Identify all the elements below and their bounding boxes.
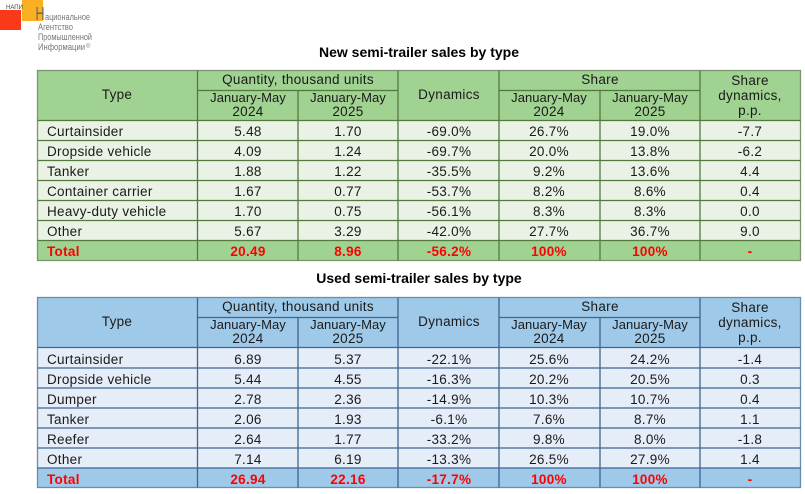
- row: Dropside vehicle: 20.5%: [630, 372, 670, 387]
- row: Dropside vehicle: -6.2: [738, 144, 762, 159]
- row: Dumper: 0.4: [740, 392, 760, 407]
- row: Dumper: Dumper: [47, 392, 97, 407]
- row: Other: -13.3%: [427, 452, 471, 467]
- table header: Share: [731, 73, 769, 88]
- row: Reefer: Reefer: [47, 432, 90, 447]
- row: Dropside vehicle: Dropside vehicle: [47, 144, 152, 159]
- row: Dropside vehicle: -69.7%: [427, 144, 471, 159]
- row: Curtainsider: [47, 124, 762, 139]
- row: Reefer: 2.64: [234, 432, 262, 447]
- table header: 2024: [533, 104, 565, 119]
- row: Reefer: 9.8%: [533, 432, 565, 447]
- row: Other: Other: [47, 224, 82, 239]
- row: Total: Total: [47, 472, 80, 487]
- table header: 2024: [232, 331, 264, 346]
- row: Dropside vehicle: 4.55: [334, 372, 362, 387]
- row: Total: -56.2%: [427, 244, 471, 259]
- row: Tanker: 1.1: [740, 412, 760, 427]
- row: Dumper: [47, 392, 760, 407]
- row: Other: 27.7%: [529, 224, 569, 239]
- row: Dropside vehicle: 4.09: [234, 144, 262, 159]
- table: new semi-trailer sales: [38, 70, 800, 260]
- row: Dumper: 10.7%: [630, 392, 670, 407]
- row: Curtainsider: 1.70: [334, 124, 362, 139]
- row: Curtainsider: -69.0%: [427, 124, 471, 139]
- row: Curtainsider: [47, 352, 762, 367]
- table header: 2024: [232, 104, 264, 119]
- row: Total: [47, 244, 752, 259]
- row: Other: 9.0: [740, 224, 760, 239]
- row: Total: 20.49: [230, 244, 266, 259]
- table header: January-May: [612, 90, 688, 105]
- row: Dropside vehicle: [47, 372, 760, 387]
- table header: p.p.: [738, 103, 762, 118]
- row: Tanker: Tanker: [47, 412, 90, 427]
- row: Heavy-duty vehicle: 8.3%: [533, 204, 565, 219]
- heading: new semi-trailer sales: New semi-trailer sales by type: [319, 44, 519, 60]
- row: Tanker: 1.88: [234, 164, 262, 179]
- table: used semi-trailer sales: [38, 298, 800, 488]
- row: Curtainsider: 6.89: [234, 352, 262, 367]
- row: Dropside vehicle: 0.3: [740, 372, 760, 387]
- row: Dumper: 2.78: [234, 392, 262, 407]
- row: Total: 100%: [531, 244, 567, 259]
- table header: Dynamics: [418, 314, 480, 329]
- row: Container carrier: Container carrier: [47, 184, 153, 199]
- row: Other: 36.7%: [630, 224, 670, 239]
- row: Other: 26.5%: [529, 452, 569, 467]
- row: Dropside vehicle: -16.3%: [427, 372, 471, 387]
- logo: НАПИ: Н: [36, 4, 44, 24]
- row: Dumper: 10.3%: [529, 392, 569, 407]
- row: Dumper: -14.9%: [427, 392, 471, 407]
- table header: 2024: [533, 331, 565, 346]
- row: Tanker: Tanker: [47, 164, 90, 179]
- logo: НАПИ: Информации: [38, 42, 85, 52]
- table header: Share: [581, 72, 619, 87]
- row: Container carrier: -53.7%: [427, 184, 471, 199]
- row: Dropside vehicle: 1.24: [334, 144, 362, 159]
- row: Other: 1.4: [740, 452, 760, 467]
- table header: Share: [581, 299, 619, 314]
- table header: dynamics,: [718, 315, 782, 330]
- table header: [102, 72, 782, 119]
- table header: 2025: [332, 104, 364, 119]
- row: Other: -42.0%: [427, 224, 471, 239]
- row: Heavy-duty vehicle: -56.1%: [427, 204, 471, 219]
- row: Tanker: 9.2%: [533, 164, 565, 179]
- row: Curtainsider: -22.1%: [427, 352, 471, 367]
- row: Dropside vehicle: Dropside vehicle: [47, 372, 152, 387]
- row: Other: Other: [47, 452, 82, 467]
- table header: January-May: [511, 317, 587, 332]
- row: Dropside vehicle: 20.0%: [529, 144, 569, 159]
- row: Curtainsider: -7.7: [738, 124, 762, 139]
- row: Total: 8.96: [334, 244, 362, 259]
- row: Other: [47, 452, 760, 467]
- logo: НАПИ: Промышленной: [38, 32, 92, 42]
- table header: Share: [731, 300, 769, 315]
- table header: 2025: [332, 331, 364, 346]
- row: Tanker: 8.7%: [634, 412, 666, 427]
- row: Container carrier: 0.4: [740, 184, 760, 199]
- row: Curtainsider: Curtainsider: [47, 124, 124, 139]
- row: Container carrier: 8.6%: [634, 184, 666, 199]
- heading: used semi-trailer sales: Used semi-trailer sales by type: [316, 270, 522, 286]
- row: Total: 100%: [632, 244, 668, 259]
- row: Total: Total: [47, 244, 80, 259]
- row: Tanker: 7.6%: [533, 412, 565, 427]
- row: Reefer: -33.2%: [427, 432, 471, 447]
- row: Heavy-duty vehicle: 1.70: [234, 204, 262, 219]
- row: Total: 100%: [531, 472, 567, 487]
- row: Other: 27.9%: [630, 452, 670, 467]
- row: Dropside vehicle: 5.44: [234, 372, 262, 387]
- row: Total: -17.7%: [427, 472, 471, 487]
- logo: НАПИ: НАПИ: [6, 5, 23, 11]
- table header: January-May: [310, 317, 386, 332]
- table header: Quantity, thousand units: [222, 299, 374, 314]
- table header: Dynamics: [418, 87, 480, 102]
- row: Dropside vehicle: 13.8%: [630, 144, 670, 159]
- row: Curtainsider: 24.2%: [630, 352, 670, 367]
- row: Reefer: 1.77: [334, 432, 362, 447]
- row: Other: 7.14: [234, 452, 262, 467]
- logo: НАПИ: ®: [86, 43, 91, 50]
- row: Container carrier: 1.67: [234, 184, 262, 199]
- row: Tanker: 13.6%: [630, 164, 670, 179]
- table header: January-May: [310, 90, 386, 105]
- row: Tanker: 1.93: [334, 412, 362, 427]
- table header: 2025: [634, 331, 666, 346]
- row: Curtainsider: Curtainsider: [47, 352, 124, 367]
- table header: 2025: [634, 104, 666, 119]
- row: Container carrier: 0.77: [334, 184, 362, 199]
- row: Tanker: [47, 164, 760, 179]
- row: Reefer: -1.8: [738, 432, 762, 447]
- row: Tanker: [47, 412, 760, 427]
- table header: Quantity, thousand units: [222, 72, 374, 87]
- row: Tanker: 1.22: [334, 164, 362, 179]
- table header: January-May: [511, 90, 587, 105]
- row: Tanker: 4.4: [740, 164, 760, 179]
- row: Reefer: [47, 432, 762, 447]
- table header: January-May: [612, 317, 688, 332]
- logo: НАПИ: ациональное: [45, 12, 90, 22]
- row: Heavy-duty vehicle: [47, 204, 760, 219]
- row: Tanker: -6.1%: [431, 412, 467, 427]
- row: Dropside vehicle: [47, 144, 762, 159]
- row: Heavy-duty vehicle: Heavy-duty vehicle: [47, 204, 166, 219]
- row: Heavy-duty vehicle: 8.3%: [634, 204, 666, 219]
- table header: Type: [102, 87, 132, 102]
- row: Dumper: 2.36: [334, 392, 362, 407]
- row: Container carrier: [47, 184, 760, 199]
- row: Curtainsider: 5.37: [334, 352, 362, 367]
- row: Curtainsider: 26.7%: [529, 124, 569, 139]
- logo: НАПИ: [0, 0, 92, 52]
- row: Reefer: 8.0%: [634, 432, 666, 447]
- table header: [102, 299, 782, 346]
- row: Curtainsider: -1.4: [738, 352, 762, 367]
- table header: January-May: [210, 90, 286, 105]
- row: Container carrier: 8.2%: [533, 184, 565, 199]
- row: Total: 100%: [632, 472, 668, 487]
- row: Curtainsider: 5.48: [234, 124, 262, 139]
- logo: НАПИ: Агентство: [38, 22, 73, 32]
- row: Other: 5.67: [234, 224, 262, 239]
- table header: January-May: [210, 317, 286, 332]
- table header: p.p.: [738, 330, 762, 345]
- row: Dropside vehicle: 20.2%: [529, 372, 569, 387]
- row: Tanker: -35.5%: [427, 164, 471, 179]
- row: Heavy-duty vehicle: 0.75: [334, 204, 362, 219]
- row: Other: [47, 224, 760, 239]
- row: Curtainsider: 25.6%: [529, 352, 569, 367]
- row: Total: -: [748, 472, 752, 487]
- row: Other: 6.19: [334, 452, 362, 467]
- row: Other: 3.29: [334, 224, 362, 239]
- row: Total: -: [748, 244, 752, 259]
- row: Total: [47, 472, 752, 487]
- row: Curtainsider: 19.0%: [630, 124, 670, 139]
- row: Total: 22.16: [330, 472, 366, 487]
- row: Total: 26.94: [230, 472, 266, 487]
- row: Tanker: 2.06: [234, 412, 262, 427]
- row: Heavy-duty vehicle: 0.0: [740, 204, 760, 219]
- table header: Type: [102, 314, 132, 329]
- table header: dynamics,: [718, 88, 782, 103]
